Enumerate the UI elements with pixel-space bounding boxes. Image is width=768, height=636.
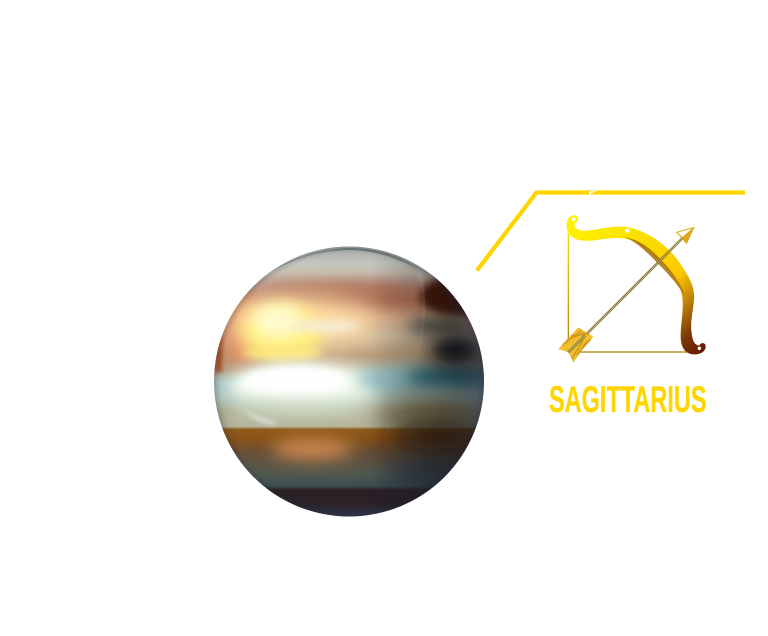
bow limb xyxy=(567,215,706,354)
bow string xyxy=(568,233,688,352)
arrow shaft xyxy=(568,237,683,352)
arrow fletching xyxy=(558,327,593,362)
callout leader line xyxy=(477,190,745,270)
planet: banded gas giant sphere xyxy=(210,245,496,520)
arrow head xyxy=(677,227,694,244)
icon: sagittarius bow and arrow xyxy=(558,215,706,362)
